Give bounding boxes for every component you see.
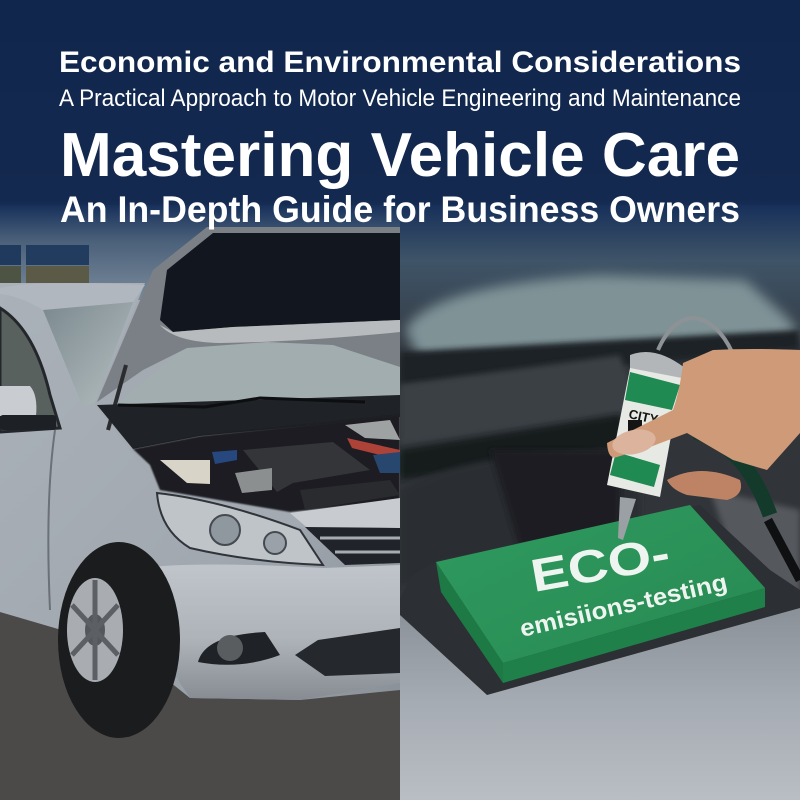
- title: Economic and Environmental Considerations: Economic and Environmental Considerations: [59, 46, 741, 79]
- door seam: [48, 430, 55, 610]
- cowl and wipers: [97, 395, 400, 449]
- hand fingers below: [667, 471, 741, 500]
- grille: [305, 527, 400, 565]
- label: emissions-testing: emisiions-testing: [517, 569, 730, 643]
- rubber tray: [400, 505, 800, 695]
- open hood: [97, 227, 400, 402]
- main heading: Mastering Vehicle Care: Mastering Vehicle Care: [60, 121, 740, 190]
- subtitle: A Practical Approach: A Practical Approach to Motor Vehicle Engineering and Maintenance: [59, 85, 741, 112]
- car body side: [0, 283, 400, 700]
- lower grille: [295, 628, 400, 676]
- sub heading: An In-Depth Guide: An In-Depth Guide for Business Owners: [60, 189, 740, 230]
- label: ECO-: ECO-: [527, 526, 674, 602]
- bonnet front edge: [290, 498, 400, 530]
- front wheel: [58, 542, 180, 738]
- panel: emissions testing close-up: [400, 205, 800, 800]
- hood surface: [400, 600, 800, 800]
- tester canister: [607, 352, 685, 540]
- engine bay: [133, 415, 400, 512]
- fog lamp: [198, 632, 280, 665]
- front bumper: [159, 564, 400, 700]
- panel: car with open hood: [0, 205, 400, 800]
- roof: [90, 284, 145, 306]
- hand: [607, 349, 800, 470]
- car base fill: [95, 300, 400, 530]
- headlight: [157, 493, 323, 565]
- building backdrop: [0, 205, 400, 305]
- ground: [0, 612, 400, 800]
- side mirror: [0, 386, 56, 430]
- windshield: [43, 302, 133, 392]
- view through windshield under hood: [115, 343, 400, 405]
- side window: [0, 308, 60, 432]
- blurred engine background: [400, 243, 800, 598]
- machinery at right: [710, 494, 800, 590]
- hose: [658, 318, 800, 580]
- canister label: CITY: [627, 406, 660, 427]
- hood strut: [108, 365, 126, 430]
- title block: [59, 46, 741, 230]
- green block: [436, 505, 765, 683]
- nozzle: [618, 497, 636, 540]
